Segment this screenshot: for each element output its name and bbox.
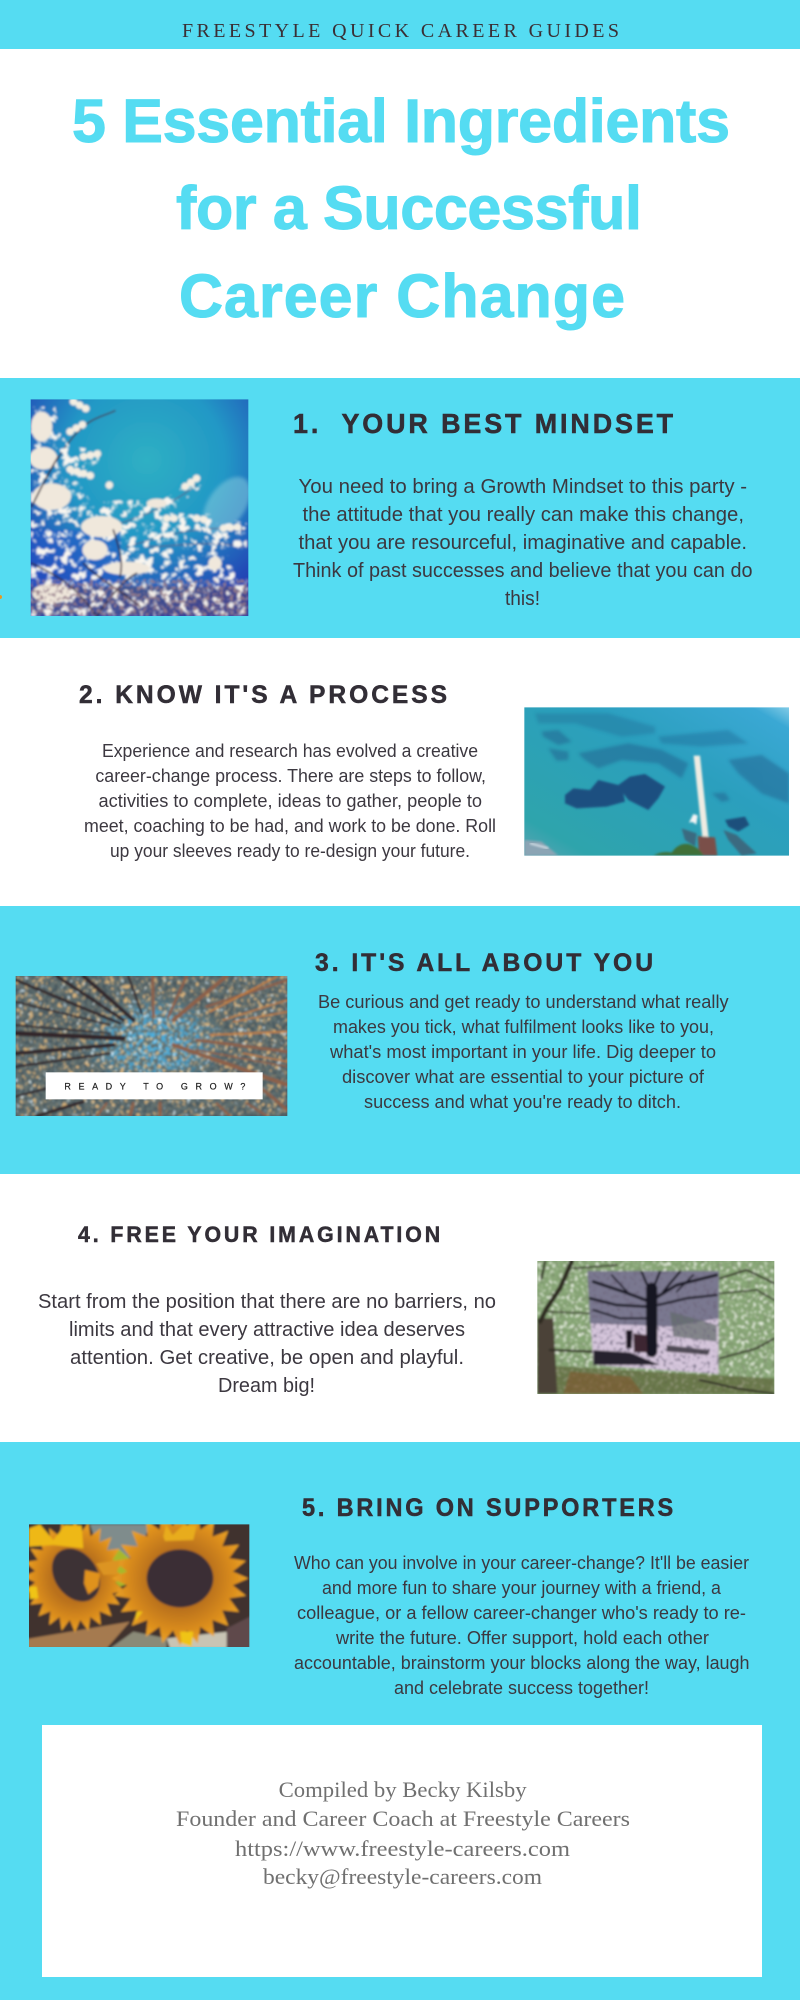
panel: 1 your best mindset [0, 378, 800, 638]
body text: You need to bring a Growth Mindset to this party - [298, 476, 747, 498]
title: for a Successful [176, 174, 642, 242]
panel: credits: Founder and Career Coach at Freestyle Careers [176, 1806, 630, 1831]
heading: 4. FREE YOUR IMAGINATION [78, 1222, 443, 1247]
heading: 2. KNOW IT'S A PROCESS [79, 681, 450, 709]
body text: Dream big! [218, 1375, 315, 1397]
panel: 5 bring on supporters [0, 1442, 800, 2000]
body text: and more fun to share your journey with a friend, a [322, 1578, 722, 1598]
body text: and celebrate success together! [394, 1678, 649, 1698]
header band [0, 0, 800, 49]
caption box [46, 1072, 263, 1099]
panel: credits: Compiled by Becky Kilsby [279, 1777, 527, 1802]
body text: Think of past successes and believe that you can do [293, 560, 752, 582]
panel: 3 it's all about you [0, 906, 800, 1174]
panel: credits [42, 1725, 762, 1977]
body text: Start from the position that there are no barriers, no [38, 1291, 496, 1313]
body text [318, 992, 729, 1112]
body text [84, 741, 496, 861]
body text: write the future. Offer support, hold each other [335, 1628, 709, 1648]
left sunflower [29, 1524, 124, 1633]
title: Career Change [179, 262, 625, 330]
title: 5 Essential Ingredients [72, 87, 730, 155]
panel: 2 know it's a process [80, 685, 789, 861]
panel: credits: https://www.freestyle-careers.com [235, 1836, 570, 1861]
body text [294, 1553, 750, 1698]
body text: Who can you involve in your career-change? It'll be easier [294, 1553, 749, 1573]
body text: makes you tick, what fulfilment looks like to you, [333, 1017, 714, 1037]
body text [293, 476, 752, 610]
photo: blossom against blue sky [30, 399, 248, 616]
body text: this! [505, 588, 540, 610]
body text: the attitude that you really can make this change, [302, 504, 744, 526]
photo: looking up at pine trees [16, 976, 288, 1116]
body text: up your sleeves ready to re-design your future. [110, 841, 470, 861]
title [72, 87, 730, 330]
body text: discover what are essential to your picture of [342, 1067, 705, 1087]
body text: Experience and research has evolved a creative [102, 741, 478, 761]
photo: jetty over turquoise sea [524, 707, 789, 856]
body text: attention. Get creative, be open and playful. [70, 1347, 464, 1369]
body text: limits and that every attractive idea deserves [69, 1319, 465, 1341]
body text: career-change process. There are steps to follow, [95, 766, 486, 786]
body text: what's most important in your life. Dig deeper to [329, 1042, 716, 1062]
body text: Be curious and get ready to understand what really [318, 992, 729, 1012]
body text: colleague, or a fellow career-changer who's ready to re- [297, 1603, 746, 1623]
body text: activities to complete, ideas to gather, people to [98, 791, 482, 811]
heading: 5. BRING ON SUPPORTERS [302, 1494, 676, 1522]
body text: accountable, brainstorm your blocks along the way, laugh [294, 1653, 750, 1673]
heading: 1. YOUR BEST MINDSET [293, 408, 676, 439]
caption box: READY TO GROW? [64, 1082, 245, 1092]
heading: 3. IT'S ALL ABOUT YOU [315, 949, 656, 977]
body text: that you are resourceful, imaginative and capable. [298, 532, 747, 554]
right sunflower [96, 1511, 248, 1647]
panel: 4 free your imagination [39, 1226, 774, 1396]
photo: two sunflowers [29, 1524, 250, 1647]
photo: tree canvas hanging in woodland [537, 1261, 774, 1394]
panel: credits: becky@freestyle-careers.com [263, 1864, 542, 1889]
body text: meet, coaching to be had, and work to be done. Roll [84, 816, 496, 836]
body text [38, 1291, 496, 1397]
body text: success and what you're ready to ditch. [364, 1092, 681, 1112]
series label: FREESTYLE QUICK CAREER GUIDES [182, 20, 619, 42]
